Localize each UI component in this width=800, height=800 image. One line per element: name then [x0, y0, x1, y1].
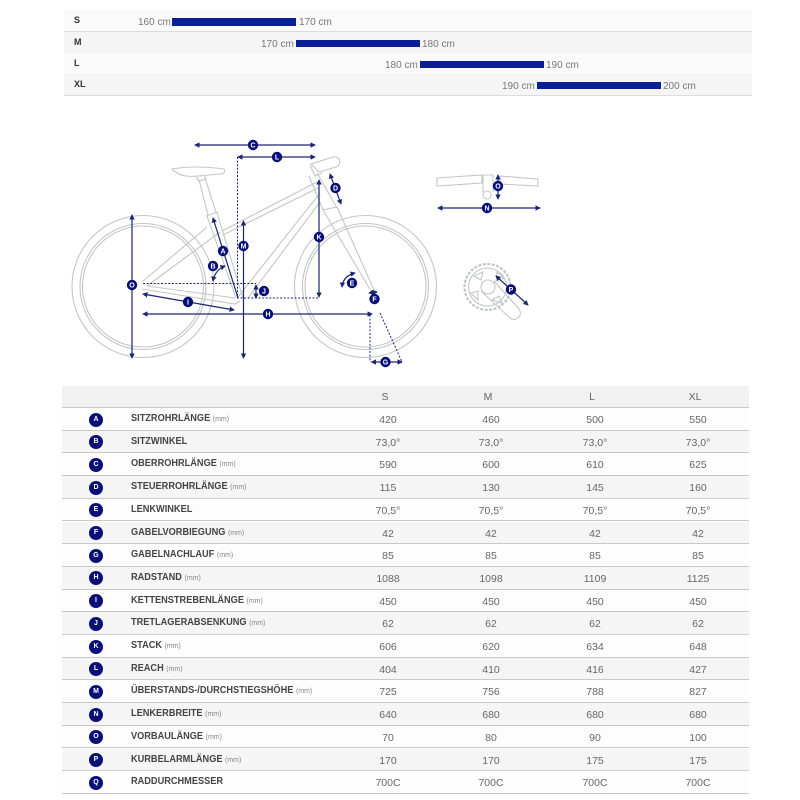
row D: D	[93, 484, 99, 491]
row H: 1098	[479, 573, 503, 585]
row J: 62	[589, 618, 601, 630]
row O: O	[93, 733, 99, 740]
table header: M	[484, 390, 492, 402]
row J: 62	[382, 618, 394, 630]
dimension D	[330, 174, 341, 204]
row G	[62, 544, 749, 567]
row F: GABELVORBIEGUNG (mm)	[131, 526, 244, 538]
dimension C	[195, 144, 315, 146]
row N: 680	[482, 709, 500, 721]
row Q: 700C	[685, 777, 711, 789]
row K: 648	[689, 641, 707, 653]
row N: N	[93, 711, 99, 718]
row N: 680	[586, 709, 604, 721]
badge D: D	[333, 186, 338, 192]
row B: 73,0°	[479, 437, 503, 449]
row K: K	[93, 642, 99, 650]
size row L: L	[74, 58, 80, 68]
row F: F	[94, 529, 98, 536]
chainring and crank	[464, 264, 510, 310]
row A: 550	[689, 414, 707, 426]
dimension J	[255, 285, 257, 298]
row C: 600	[482, 459, 500, 471]
row E: 70,5°	[583, 505, 607, 517]
row F	[62, 522, 749, 544]
badge M: M	[241, 244, 247, 250]
row P: 170	[379, 754, 397, 766]
row N: LENKERBREITE (mm)	[131, 708, 221, 719]
row M: 827	[689, 686, 707, 698]
row M: 756	[482, 686, 500, 698]
badge A: A	[220, 248, 226, 256]
size row M: 180 cm	[422, 38, 455, 50]
row E: 70,5°	[686, 505, 710, 517]
row C: 625	[689, 459, 707, 471]
front wheel	[294, 216, 436, 358]
row O: VORBAULÄNGE (mm)	[131, 731, 222, 742]
badge C: C	[250, 142, 256, 150]
badge E	[347, 278, 357, 288]
dimension G	[372, 361, 402, 363]
row F: 42	[485, 528, 497, 540]
row E: E	[94, 506, 98, 513]
stem and grip	[310, 157, 340, 176]
size row L: 190 cm	[546, 60, 579, 70]
dimension lines	[132, 145, 540, 362]
badge B: B	[210, 264, 216, 270]
row Q: 700C	[582, 777, 608, 789]
badge O	[493, 181, 503, 191]
row D: 130	[482, 482, 500, 494]
row Q: 700C	[375, 777, 401, 789]
row L: 404	[379, 664, 397, 676]
handlebar front view	[437, 175, 538, 199]
size row S: S	[74, 15, 80, 25]
dimension M	[242, 221, 244, 358]
row K: 606	[379, 641, 397, 653]
row P: P	[94, 756, 98, 763]
row H	[62, 567, 749, 590]
row N: 640	[379, 709, 397, 721]
row K: STACK (mm)	[131, 640, 181, 651]
row Q	[62, 771, 749, 794]
row I: 450	[689, 596, 707, 608]
row P	[62, 748, 749, 771]
row Q: Q	[93, 779, 99, 786]
row H: 1125	[687, 573, 709, 585]
row I: 450	[586, 596, 604, 608]
badge J	[259, 286, 269, 296]
badge L: L	[275, 154, 280, 162]
row J: 62	[692, 618, 704, 630]
badge C	[248, 140, 258, 150]
badge L	[272, 152, 282, 162]
fork	[323, 207, 374, 291]
row H: RADSTAND (mm)	[131, 572, 201, 583]
row B: 73,0°	[686, 437, 710, 449]
geometry table	[62, 386, 749, 794]
row L: 416	[586, 664, 604, 676]
badge B	[208, 261, 218, 271]
saddle	[172, 167, 224, 181]
size row S: 160 cm	[138, 17, 171, 28]
badge P: P	[509, 287, 514, 294]
row G: GABELNACHLAUF (mm)	[131, 549, 233, 560]
row E: 70,5°	[376, 505, 400, 517]
row B: 73,0°	[583, 437, 607, 449]
row L: REACH (mm)	[131, 663, 183, 674]
row M	[62, 680, 749, 703]
size row S	[64, 10, 752, 32]
dimension I	[143, 294, 234, 310]
row G: 85	[382, 550, 394, 562]
row L: 410	[482, 664, 500, 676]
row M: 725	[379, 686, 397, 698]
dimension F	[369, 292, 377, 293]
badge I	[183, 297, 193, 307]
row K: 620	[482, 641, 500, 653]
badge G: G	[383, 360, 389, 366]
letter badges	[127, 140, 516, 367]
badge Q left: O	[129, 282, 135, 290]
row G: 85	[589, 550, 601, 562]
badge J: J	[262, 288, 266, 296]
table header	[62, 386, 749, 408]
row I: 450	[482, 596, 500, 608]
row P: 175	[689, 754, 707, 766]
bicycle drawing	[72, 157, 538, 358]
row A: SITZROHRLÄNGE (mm)	[131, 413, 229, 424]
table header: L	[589, 390, 595, 402]
row G: G	[93, 552, 99, 559]
row A: 420	[379, 414, 397, 426]
badge A	[218, 246, 228, 256]
row C: OBERROHRLÄNGE (mm)	[131, 458, 236, 469]
row O: 90	[589, 732, 601, 744]
row A: 460	[482, 414, 500, 426]
table header: XL	[689, 390, 701, 402]
row L: 427	[689, 664, 707, 676]
row E	[62, 499, 749, 521]
dimension O stem	[497, 175, 499, 199]
row C: C	[93, 461, 99, 468]
row C: 610	[586, 459, 604, 471]
row F: 42	[589, 528, 601, 540]
badge N	[482, 203, 492, 213]
row K	[62, 635, 749, 658]
row G: 85	[692, 550, 704, 562]
badge D	[330, 183, 341, 193]
size row M: M	[74, 36, 82, 46]
row M: 788	[586, 686, 604, 698]
row B: B	[93, 438, 99, 445]
row D: 115	[380, 482, 396, 494]
row J: TRETLAGERABSENKUNG (mm)	[131, 617, 265, 628]
row J: 62	[485, 618, 497, 630]
row I: KETTENSTREBENLÄNGE (mm)	[131, 595, 263, 606]
row A: 500	[586, 414, 604, 426]
frame	[142, 173, 337, 304]
row P: 170	[482, 754, 500, 766]
row C	[62, 453, 749, 476]
row F: 42	[382, 528, 394, 540]
badge Q left	[127, 280, 137, 290]
row O: 80	[485, 732, 497, 744]
badge H: H	[265, 312, 271, 318]
row D: 145	[586, 482, 604, 494]
table header: S	[381, 390, 388, 402]
row D	[62, 476, 749, 499]
row B	[62, 431, 749, 453]
row O	[62, 726, 749, 748]
size row L: 180 cm	[385, 60, 418, 70]
row D: STEUERROHRLÄNGE (mm)	[131, 481, 246, 492]
row A	[62, 408, 749, 431]
size row XL	[64, 74, 752, 96]
dimension H	[143, 313, 372, 315]
dimension N	[438, 207, 540, 209]
row I: I	[95, 597, 97, 604]
badge M	[238, 241, 249, 251]
row P: 175	[586, 754, 604, 766]
row B: 73,0°	[376, 437, 400, 449]
row G: 85	[485, 550, 497, 562]
size row L	[64, 52, 752, 74]
row H: 1109	[584, 573, 606, 585]
size row XL: XL	[74, 78, 86, 88]
dimension Q wheel diameter	[131, 215, 133, 358]
row N: 680	[689, 709, 707, 721]
row H: H	[93, 574, 99, 581]
row O: 70	[382, 732, 394, 744]
dimension P	[496, 276, 528, 305]
row E: 70,5°	[479, 505, 503, 517]
bike geometry diagram	[72, 140, 541, 368]
row J: J	[94, 620, 98, 627]
row H: 1088	[376, 573, 400, 585]
row L: L	[94, 665, 98, 672]
badge F: F	[372, 296, 377, 304]
dimension K	[318, 180, 320, 297]
dashed guide lines	[143, 157, 402, 362]
dimension E	[342, 273, 355, 287]
row I	[62, 590, 749, 612]
badge I: I	[187, 300, 189, 306]
row Q: 700C	[478, 777, 504, 789]
row K: 634	[586, 641, 604, 653]
badge N: N	[484, 206, 490, 212]
badge K: K	[316, 234, 322, 242]
rear wheel	[72, 216, 214, 358]
row I: 450	[379, 596, 397, 608]
dimension A	[213, 218, 238, 298]
row C: 590	[379, 459, 397, 471]
row N	[62, 703, 749, 726]
badge F	[369, 294, 380, 304]
row M: ÜBERSTANDS-/DURCHSTIEGSHÖHE (mm)	[131, 685, 312, 696]
row D: 160	[689, 482, 707, 494]
dimension L	[238, 156, 315, 158]
size row S: 170 cm	[299, 17, 332, 28]
row L	[62, 658, 749, 680]
size row XL: 200 cm	[663, 80, 696, 92]
seatpost	[199, 178, 218, 216]
badge G	[380, 357, 391, 367]
row J	[62, 612, 749, 635]
size row M	[64, 32, 752, 54]
badge H	[263, 309, 273, 319]
row P: KURBELARMLÄNGE (mm)	[131, 754, 241, 764]
row O: 100	[689, 732, 707, 744]
row F: 42	[692, 528, 704, 540]
badge E: E	[350, 280, 355, 288]
badge O: O	[495, 184, 501, 190]
row M: M	[93, 688, 99, 695]
rider height size chart	[64, 15, 752, 96]
badge K	[314, 232, 324, 242]
row E: LENKWINKEL	[131, 504, 192, 515]
size row M: 170 cm	[261, 38, 294, 50]
dimension B	[213, 266, 225, 281]
badge P	[506, 284, 516, 295]
size row XL: 190 cm	[502, 80, 535, 92]
row A: A	[93, 416, 99, 422]
row B: SITZWINKEL	[131, 436, 187, 447]
row Q: RADDURCHMESSER	[131, 776, 223, 787]
